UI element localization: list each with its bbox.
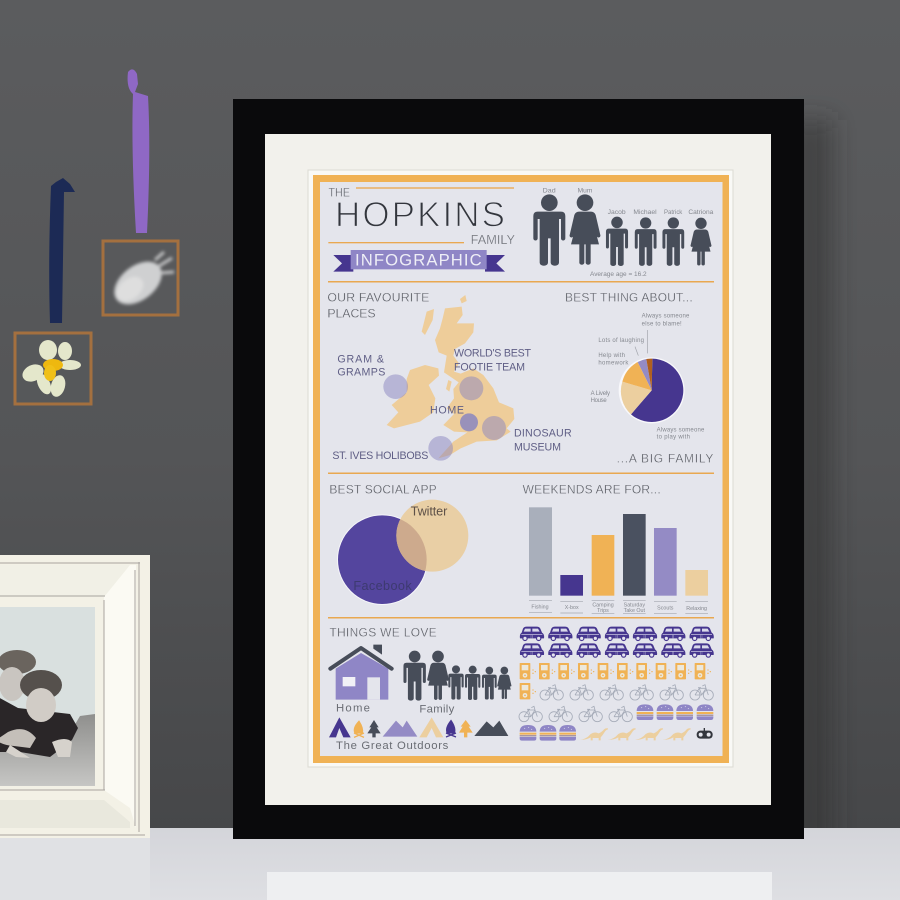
mount opening bevel [308,170,733,767]
heading: weekends are for: WEEKENDS ARE FOR... [523,482,661,496]
icon: house [330,645,392,714]
venn diagram: Facebook [353,579,412,593]
map labels [332,347,572,462]
map labels: MUSEUM [514,441,561,453]
heading: best thing about: BEST THING ABOUT... [565,291,693,305]
bar chart labels: Saturday [624,602,645,608]
bar chart labels: Fishing [531,605,549,611]
icons: great outdoors [329,717,508,752]
photo [0,607,95,786]
title: the hopkins family: HOPKINS [335,196,505,235]
infographic poster [313,175,729,763]
pie chart labels: Always someone [657,427,705,433]
map location circles [383,374,506,461]
pie chart labels: A Lively [591,391,610,397]
title: the hopkins family [328,186,516,247]
pie chart labels: Always someone [642,314,690,320]
heading: our favourite places: PLACES [327,307,376,321]
bar chart labels: X-box [565,605,579,611]
banner: infographic: INFOGRAPHIC [355,250,482,269]
heading: best social app: BEST SOCIAL APP [329,482,437,496]
bar chart labels [529,601,708,614]
icons: music players [520,663,711,699]
icons: bicycles [519,685,713,722]
white mount [265,134,771,805]
family member names: Mum [578,189,592,195]
feather [106,252,174,313]
pie chart [619,357,685,423]
map labels: HOME [430,404,464,416]
white picture frame with family photo [0,555,150,838]
map labels: GRAMPS [337,367,385,379]
icons: taxis [520,627,714,657]
heading: our favourite places [327,291,429,321]
heading: things we love: THINGS WE LOVE [329,626,437,640]
bar chart labels: Trips [597,608,609,614]
panel: header [328,186,714,278]
pie chart labels: to play with [657,434,690,440]
title: the hopkins family: FAMILY [471,233,516,247]
bar chart [529,507,708,596]
frame shadow on wall [804,114,838,828]
family member names: Patrick [664,210,682,216]
pie chart labels: Help with [598,353,625,359]
orange border panel [313,175,729,763]
pie chart labels: homework [598,360,628,366]
shelf surface [0,828,900,900]
hanging frame: daffodil with navy ribbon [15,178,91,404]
daffodil [20,340,81,398]
map of Britain and Ireland [387,295,514,458]
black poster frame [233,99,804,839]
pie chart labels: House [591,398,607,404]
heading: our favourite places: OUR FAVOURITE [327,291,429,305]
icons: burgers [520,704,713,741]
pie chart labels [591,314,705,440]
average age: Average age = 16.2 [590,272,647,278]
family member names: Jacob [608,210,626,216]
map labels: GRAM & [337,353,384,365]
map labels: FOOTIE TEAM [454,361,525,373]
venn diagram [337,500,468,605]
family member names: Dad [543,189,556,195]
navy ribbon [49,178,75,323]
bar chart labels: Relaxing [686,606,707,612]
venn diagram: Twitter [411,505,447,519]
pie chart labels: Lots of laughing [598,338,644,344]
purple ribbon [128,69,149,233]
family member names [543,189,714,216]
icons: dinosaurs [580,728,691,740]
banner: infographic [333,250,505,272]
family member names: Michael [633,210,657,216]
icon: family [403,651,511,715]
panel: favourite places and best thing [327,291,713,466]
icon: game controller [697,728,713,739]
panel: things we love [329,626,714,752]
icons: great outdoors: The Great Outdoors [336,740,449,752]
icon: house: Home [336,702,370,714]
bar chart labels: Scouts [657,605,674,611]
title: the hopkins family: THE [328,186,350,200]
family member names: Catriona [688,210,714,216]
map labels: ST. IVES HOLIBOBS [332,450,428,462]
caption: a big family: ...A BIG FAMILY [617,452,713,466]
panel: social app and weekends [329,482,708,614]
map labels: DINOSAUR [514,428,572,440]
bar chart labels: Take Out [624,608,646,614]
family figures [533,194,711,266]
pie chart labels: else to blame! [642,321,682,327]
hanging frame: feather with purple ribbon [103,69,178,315]
bar chart labels: Camping [592,602,614,608]
map labels: WORLD'S BEST [454,347,531,359]
icon: family: Family [419,703,455,715]
